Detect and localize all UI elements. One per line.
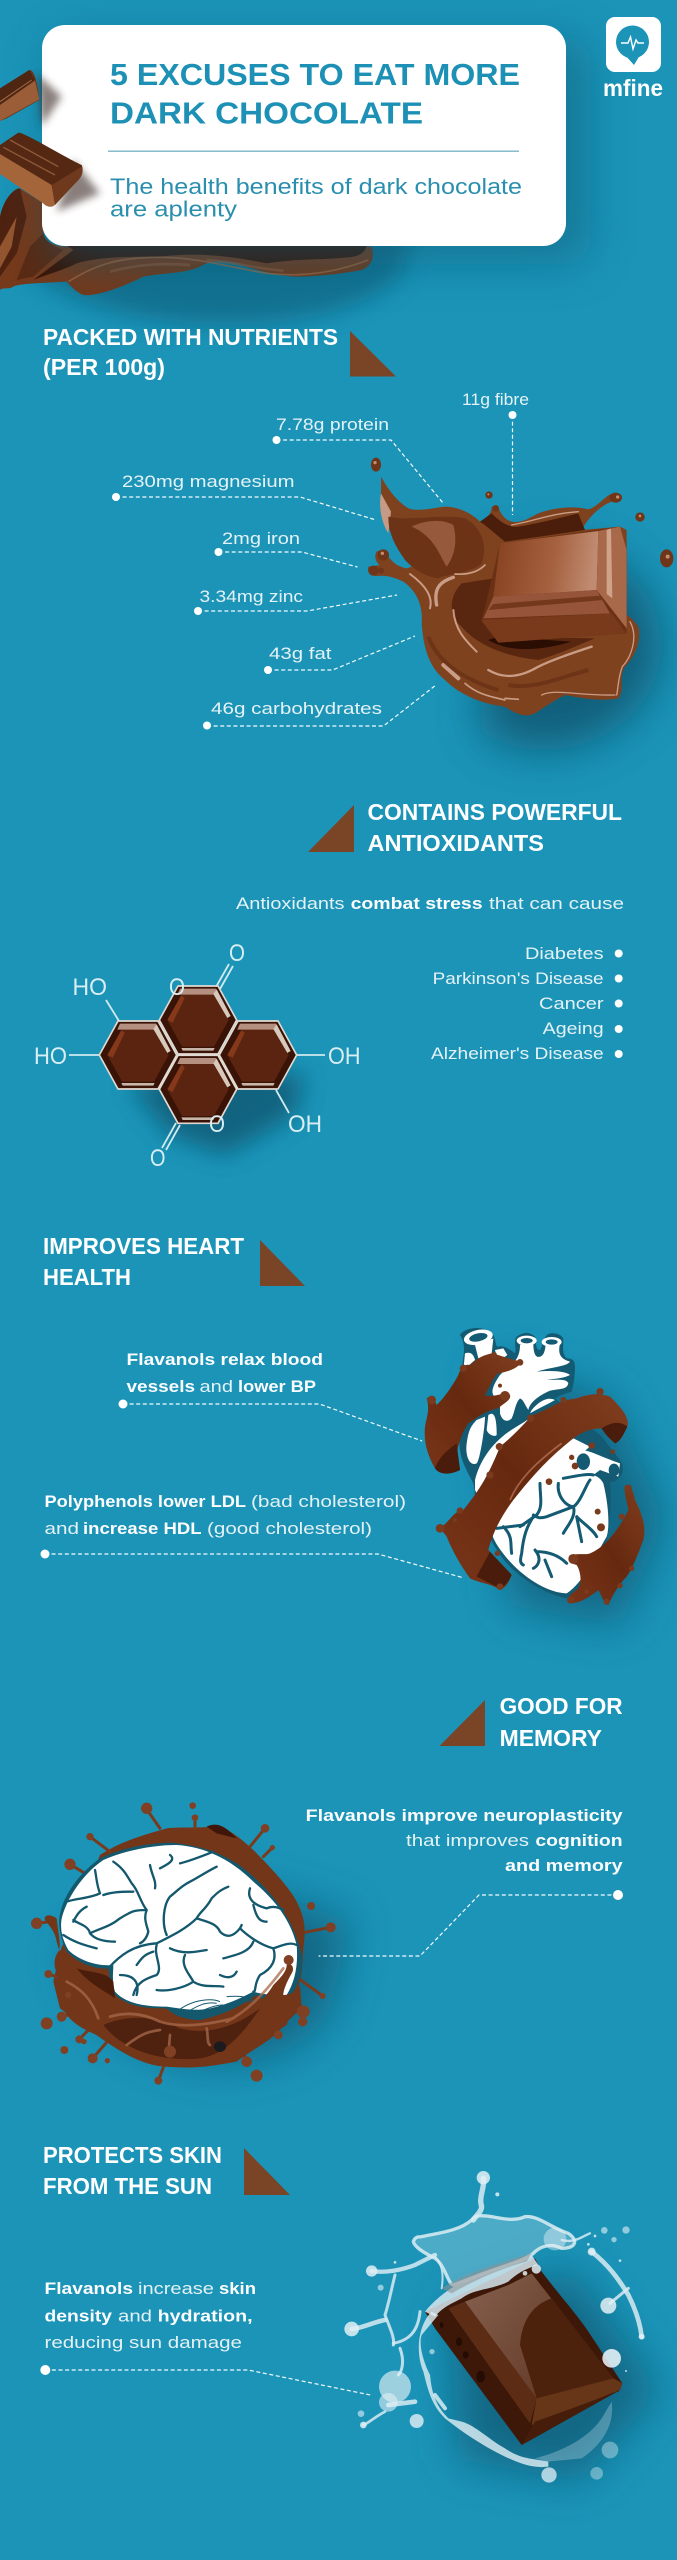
logo: mfine: mfine (603, 75, 663, 101)
hexagon rings (99, 986, 297, 1123)
callout: iron: 2mg iron (222, 529, 300, 548)
skin callout text: Flavanols (44, 2279, 133, 2298)
brain folds (63, 1852, 297, 1995)
skin callout text: hydration, (158, 2307, 253, 2326)
disease list: Ageing (543, 1019, 604, 1038)
skin callout text: reducing sun damage (44, 2333, 242, 2352)
disease list (431, 944, 623, 1063)
section 5 heading: protects skin from the sun: FROM THE SUN (43, 2173, 212, 2199)
crown spikes (37, 1812, 331, 2081)
heart callout: flavanols: Flavanols relax blood (126, 1350, 323, 1369)
section 1 heading: packed with nutrients: (PER 100g) (43, 354, 165, 380)
section 5 heading: protects skin from the sun: PROTECTS SKIN (43, 2142, 222, 2168)
chocolate drops (31, 1802, 336, 2085)
disease list: Alzheimer's Disease (431, 1044, 604, 1063)
heart silhouette (459, 1328, 623, 1598)
disease list: Parkinson's Disease (433, 969, 604, 988)
icon: speech bubble with pulse (616, 26, 649, 65)
chocolate block (482, 527, 627, 643)
antioxidants intro text: combat stress (351, 894, 483, 913)
molecule labels: HO (72, 974, 107, 1001)
heart callout: polyphenols: (bad cholesterol) (251, 1492, 406, 1511)
antioxidants intro text (236, 894, 624, 913)
triangle accent 5 (244, 2148, 290, 2195)
heart callout: polyphenols: increase HDL (83, 1519, 202, 1538)
callout: magnesium (112, 472, 376, 520)
disease list: Cancer (539, 994, 604, 1013)
molecule labels: OH (288, 1111, 322, 1138)
chocolate crown back (53, 1827, 305, 2067)
heart callout: polyphenols (40, 1492, 464, 1578)
section 3 heading: improves heart health: IMPROVES HEART (43, 1233, 244, 1259)
heading: main title: DARK CHOCOLATE (110, 96, 423, 130)
section 4 heading: good for memory: GOOD FOR (500, 1693, 623, 1719)
section 4 heading: good for memory: MEMORY (500, 1725, 602, 1751)
skin callout text (40, 2279, 371, 2395)
water over bar top edge (425, 2255, 538, 2317)
skin callout text: skin (219, 2279, 256, 2298)
triangle accent 4 (440, 1700, 485, 1746)
subtitle (110, 174, 522, 222)
heart veins (497, 1475, 597, 1577)
section 3 heading: improves heart health: HEALTH (43, 1264, 131, 1290)
top chocolate swirl (0, 180, 420, 325)
callout: zinc (194, 587, 397, 615)
skin callout text: increase (138, 2279, 214, 2298)
water droplets and bubbles (344, 2171, 645, 2483)
skin callout text: and (118, 2307, 152, 2326)
callout: fibre (462, 390, 529, 515)
heart callout: polyphenols: Polyphenols lower LDL (44, 1492, 246, 1511)
section 5 heading: protects skin from the sun (43, 2142, 222, 2199)
callout: protein (272, 415, 443, 503)
section 4 heading: good for memory (500, 1693, 623, 1751)
memory callout text: that improves (406, 1831, 529, 1850)
heart white chambers (462, 1327, 620, 1593)
nutrient callouts (112, 390, 529, 730)
chocolate ribbons (425, 1353, 644, 1605)
callout: carbohydrates: 46g carbohydrates (211, 699, 382, 718)
title card (42, 25, 590, 264)
disease list: Diabetes (525, 944, 604, 963)
memory callout text: Flavanols improve neuroplasticity (306, 1806, 623, 1825)
callout: fat: 43g fat (269, 644, 332, 663)
water front ring (419, 2312, 548, 2467)
callout: iron (214, 529, 358, 567)
section 1 heading: packed with nutrients (43, 324, 338, 380)
section 2 heading: contains powerful antioxidants: ANTIOXIDANTS (368, 830, 544, 856)
water lower right sheet (535, 2402, 612, 2462)
heart callout: polyphenols: and (44, 1519, 79, 1538)
water back sheet (413, 2216, 575, 2285)
molecule diagram (34, 940, 360, 1172)
callout: fat (264, 636, 415, 674)
molecule labels: HO (34, 1043, 67, 1070)
callout: zinc: 3.34mg zinc (200, 587, 304, 606)
brain shape (59, 1843, 302, 2020)
section 2 heading: contains powerful antioxidants: CONTAINS POWERFUL (368, 799, 622, 825)
callout: fibre: 11g fibre (462, 390, 529, 409)
heart illustration (425, 1327, 665, 1625)
callout: magnesium: 230mg magnesium (122, 472, 294, 491)
chocolate splash with block (368, 458, 673, 750)
molecule labels (34, 940, 360, 1172)
heart callout: flavanols: vessels (126, 1377, 195, 1396)
memory callout text (306, 1806, 623, 1956)
memory callout text: and memory (505, 1856, 623, 1875)
molecule labels: O (150, 1145, 166, 1172)
molecule labels: O (169, 974, 185, 1001)
water streams back (352, 2178, 642, 2425)
chocolate front bowl (45, 1915, 302, 2067)
chocolate pieces over card (0, 70, 100, 212)
brain illustration (31, 1802, 350, 2085)
callout: carbohydrates (203, 685, 436, 730)
chocolate bar (425, 2258, 622, 2445)
chocolate droplets on heart (427, 1352, 634, 1605)
heading: main title: 5 EXCUSES TO EAT MORE (110, 57, 520, 92)
heart callout: flavanols: and (200, 1377, 233, 1396)
logo: mfine (603, 17, 663, 101)
triangle accent 2 (308, 805, 354, 852)
callout: protein: 7.78g protein (276, 415, 389, 434)
molecule labels: O (209, 1111, 225, 1138)
heart callout: flavanols: lower BP (238, 1377, 316, 1396)
antioxidants intro text: that can cause (489, 894, 624, 913)
triangle accent 1 (350, 331, 396, 376)
molecule labels: OH (328, 1043, 360, 1070)
chocolate bar in water splash (344, 2171, 660, 2483)
section 2 heading: contains powerful antioxidants (368, 799, 622, 856)
triangle accent 3 (260, 1240, 305, 1286)
antioxidants intro text: Antioxidants (236, 894, 344, 913)
molecule labels: O (229, 940, 245, 967)
subtitle: The health benefits of dark chocolate (110, 174, 522, 199)
memory callout text: cognition (535, 1831, 623, 1850)
section 3 heading: improves heart health (43, 1233, 244, 1290)
chocolate drops (368, 458, 673, 576)
section 1 heading: packed with nutrients: PACKED WITH NUTRIENTS (43, 324, 338, 350)
subtitle: are aplenty (110, 196, 237, 222)
heart callout: polyphenols: (good cholesterol) (207, 1519, 372, 1538)
heading: main title (110, 57, 520, 130)
skin callout text: density (44, 2307, 113, 2326)
heart callout: flavanols (118, 1350, 422, 1441)
